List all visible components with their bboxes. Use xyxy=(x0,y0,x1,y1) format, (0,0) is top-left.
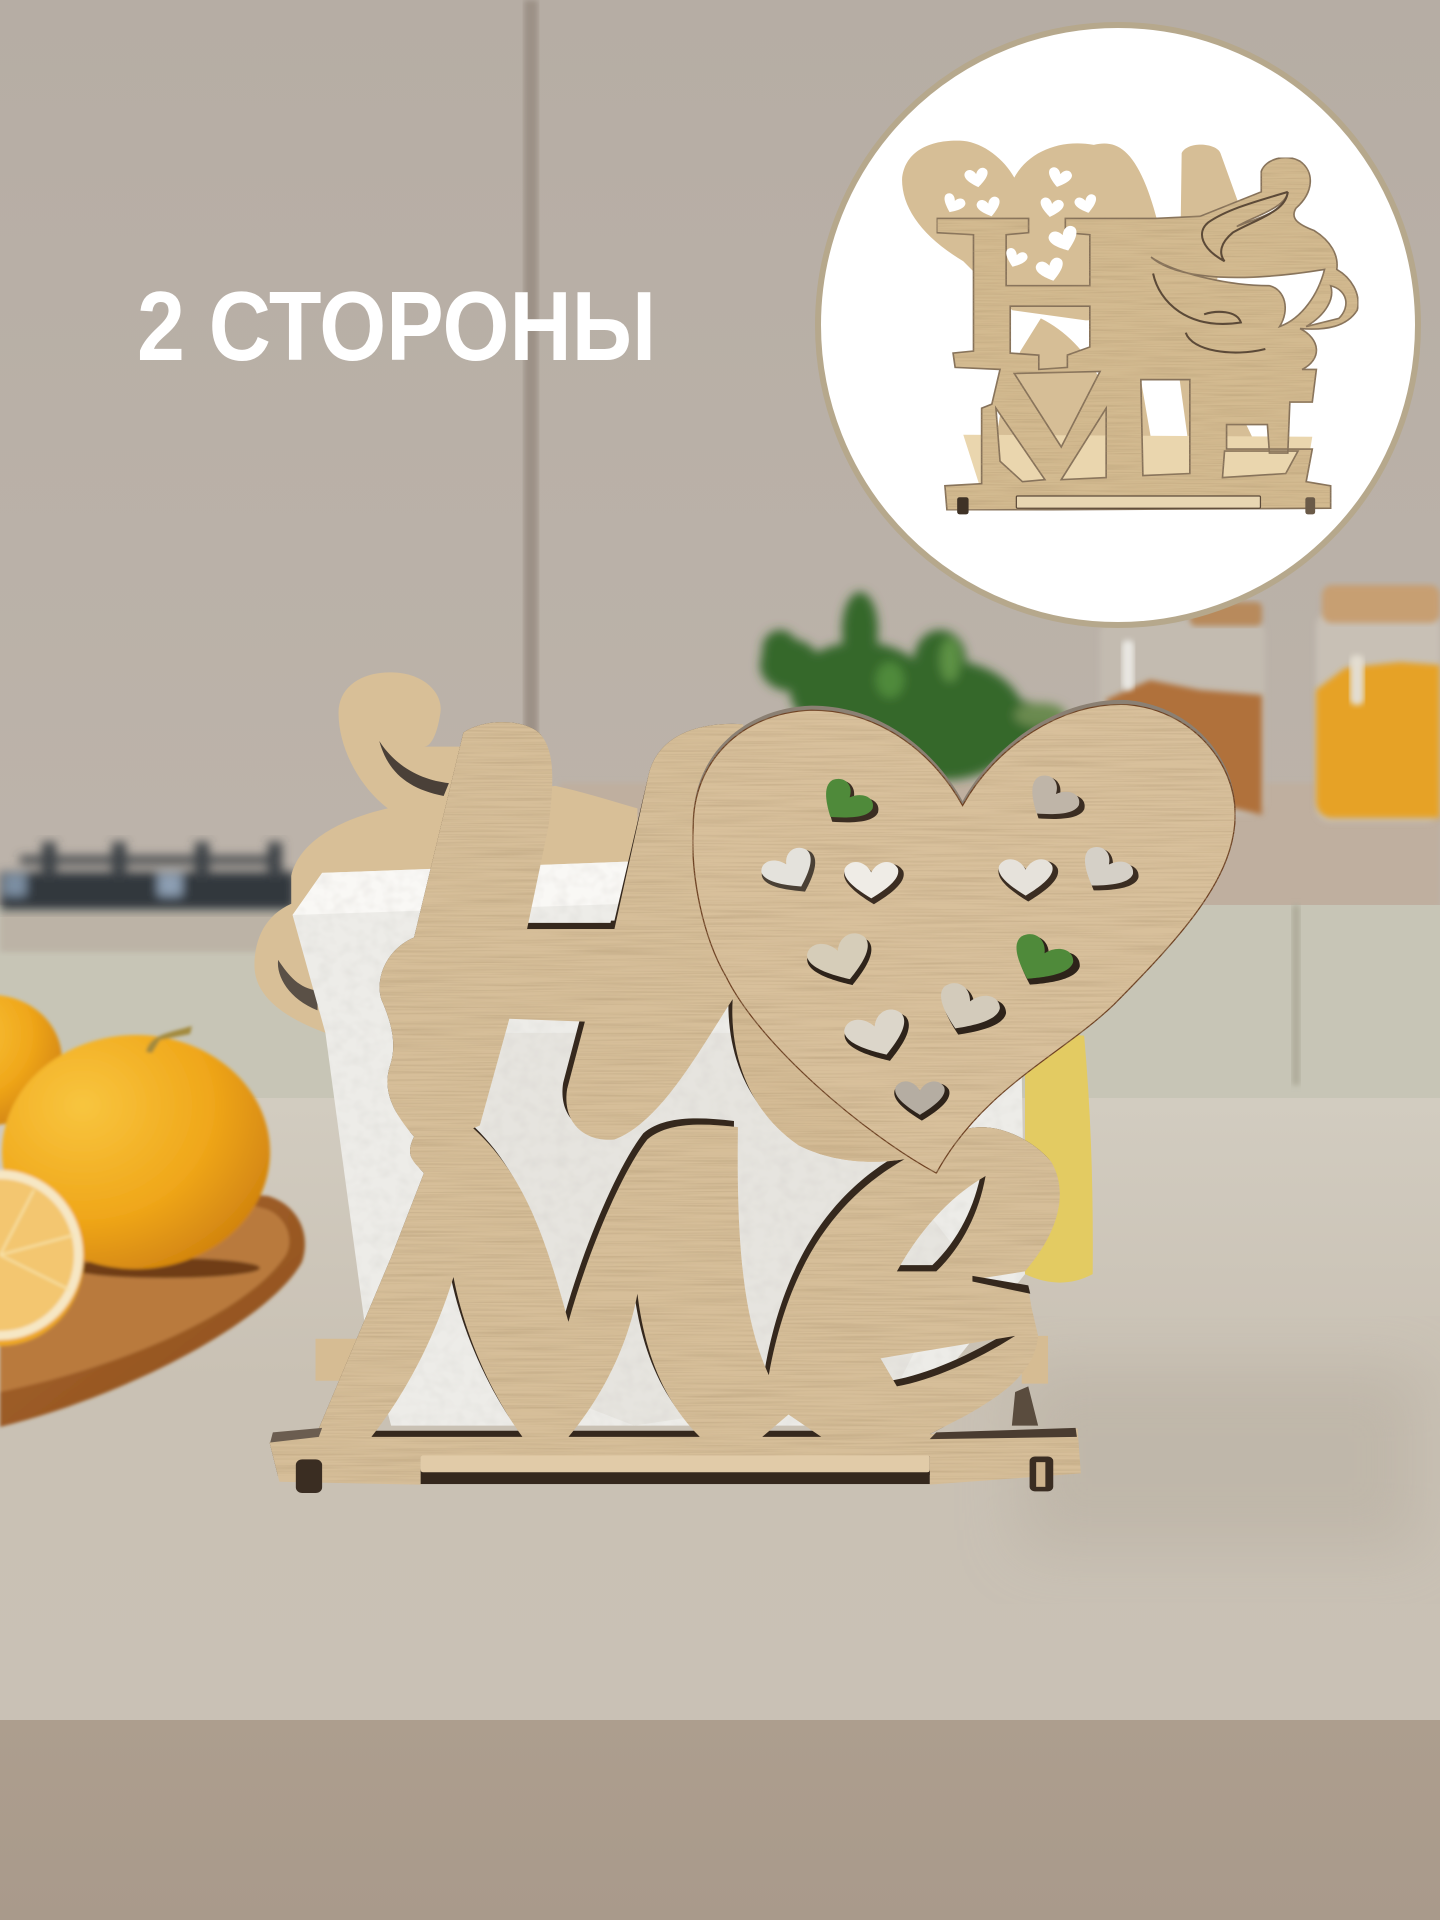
base slot and feet xyxy=(270,1428,1077,1493)
mirror base xyxy=(963,435,1312,486)
orange xyxy=(2,1035,270,1269)
lower heart lobe xyxy=(733,982,936,1173)
rear cup piece xyxy=(254,672,637,1033)
heart xyxy=(693,704,1235,1173)
inset product xyxy=(902,141,1358,514)
inset feet and slot xyxy=(957,496,1315,514)
rear base parts xyxy=(316,1336,1048,1384)
stem xyxy=(146,1026,192,1053)
lemon slice xyxy=(0,1170,84,1346)
yellow sponge xyxy=(1025,1035,1093,1283)
tiny hearts xyxy=(940,166,1099,284)
jars xyxy=(1100,585,1440,822)
plate with fruit xyxy=(0,995,305,1427)
main product: napkin holder xyxy=(254,672,1235,1493)
wood edge shadow xyxy=(266,716,1077,1478)
rear letters xyxy=(996,145,1253,439)
E notch shadow xyxy=(972,1276,1030,1294)
front lettering and cup xyxy=(937,158,1358,510)
stove xyxy=(0,842,295,910)
left orange xyxy=(0,995,62,1125)
inset circle xyxy=(818,25,1418,625)
rear heart xyxy=(902,141,1157,320)
napkin xyxy=(293,862,1025,1426)
wooden plate xyxy=(0,1190,305,1427)
plant xyxy=(760,592,1066,780)
cup outlines xyxy=(1153,192,1288,353)
heart cut-outs xyxy=(757,772,1143,1121)
HOME lettering xyxy=(270,722,1081,1485)
title: 2 СТОРОНЫ xyxy=(137,271,656,381)
plate shadow xyxy=(70,1258,260,1278)
heart rim xyxy=(693,700,1235,1169)
